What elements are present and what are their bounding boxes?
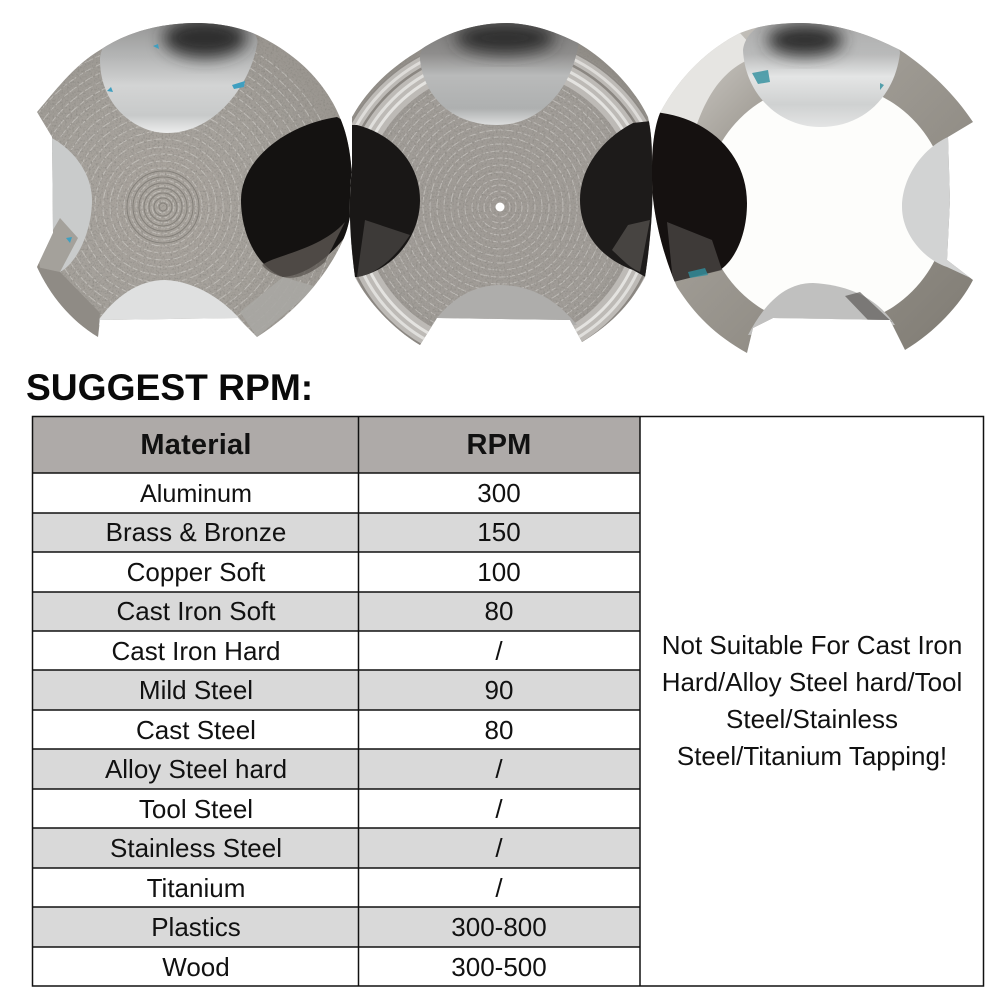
heading: SUGGEST RPM:	[26, 366, 313, 408]
column headers: RPM	[466, 429, 532, 461]
note: unsuitable materials: Steel/Titanium Tapping!	[677, 741, 947, 771]
blue flecks	[66, 44, 245, 243]
metal face with concentric machining rings	[37, 23, 352, 337]
lower-right grooved band	[240, 277, 317, 337]
RPM column: /	[495, 873, 503, 903]
top scoop shadow	[455, 22, 555, 54]
note: unsuitable materials: Steel/Stainless	[726, 704, 898, 734]
bottom scoop	[95, 280, 245, 325]
bottom scoop dark streak	[845, 292, 892, 322]
left dark scoop	[345, 125, 420, 277]
grooved outer band	[350, 55, 652, 345]
bottom scoop	[748, 283, 895, 335]
table: suggested RPM by material	[32, 416, 984, 986]
header row background	[33, 417, 640, 473]
column headers	[140, 429, 532, 461]
column headers: Material	[140, 429, 252, 461]
metal face with concentric rings	[345, 15, 660, 350]
material column	[105, 480, 287, 982]
photo: drill bit face, right with white centre	[645, 15, 985, 360]
material column: Alloy Steel hard	[105, 754, 287, 784]
ring highlight	[660, 33, 746, 124]
RPM column: 80	[485, 596, 513, 626]
RPM column: /	[495, 794, 503, 824]
right scoop	[902, 137, 970, 278]
note: unsuitable materials	[662, 630, 962, 771]
material column: Plastics	[151, 912, 241, 942]
left scoop lower sheen	[357, 220, 410, 277]
top scoop	[743, 15, 900, 127]
teal flecks	[688, 70, 884, 278]
left scoop	[39, 138, 92, 272]
note: unsuitable materials: Not Suitable For Cast Iron	[662, 630, 962, 660]
RPM column	[451, 478, 547, 982]
material column: Cast Iron Soft	[117, 596, 276, 626]
left scoop lower sheen	[667, 222, 722, 282]
outer ring	[645, 15, 985, 360]
photo: drill bit face, centre	[350, 23, 652, 345]
RPM column: 300	[477, 478, 521, 508]
RPM column: 150	[477, 517, 521, 547]
material column: Aluminum	[140, 480, 252, 508]
material column: Cast Iron Hard	[111, 636, 281, 666]
RPM column: /	[495, 833, 503, 863]
bottom scoop	[432, 285, 577, 325]
note: unsuitable materials: Hard/Alloy Steel hard/Tool	[662, 667, 962, 697]
material column: Wood	[162, 952, 230, 982]
material column: Titanium	[147, 873, 245, 903]
material column: Copper Soft	[127, 557, 266, 587]
material column: Cast Steel	[136, 715, 256, 745]
material column: Tool Steel	[139, 794, 253, 824]
right dark scoop	[241, 117, 360, 277]
RPM column: 90	[485, 675, 513, 705]
top scoop shadow	[767, 24, 843, 56]
RPM column: 300-800	[451, 912, 547, 942]
right dark scoop	[580, 121, 652, 277]
RPM column: /	[495, 754, 503, 784]
photo: drill bit face, left	[37, 23, 352, 337]
centre hole	[496, 202, 504, 212]
top scoop	[420, 15, 578, 125]
material column: Stainless Steel	[110, 833, 282, 863]
material column: Mild Steel	[139, 675, 253, 705]
RPM column: 80	[485, 715, 513, 745]
left dark scoop	[645, 110, 747, 285]
right scoop lower sheen	[612, 220, 650, 272]
top scoop shadow	[163, 18, 247, 58]
top scoop	[100, 15, 258, 133]
RPM column: 100	[477, 557, 521, 587]
material column: Brass & Bronze	[106, 517, 286, 547]
left scoop lower wear	[36, 218, 78, 272]
RPM column: /	[495, 636, 503, 666]
lower-left edge	[37, 267, 100, 337]
white centre	[722, 97, 934, 320]
RPM column: 300-500	[451, 952, 547, 982]
alternating row shading	[33, 513, 640, 947]
dark scoop lower sheen	[262, 222, 345, 278]
